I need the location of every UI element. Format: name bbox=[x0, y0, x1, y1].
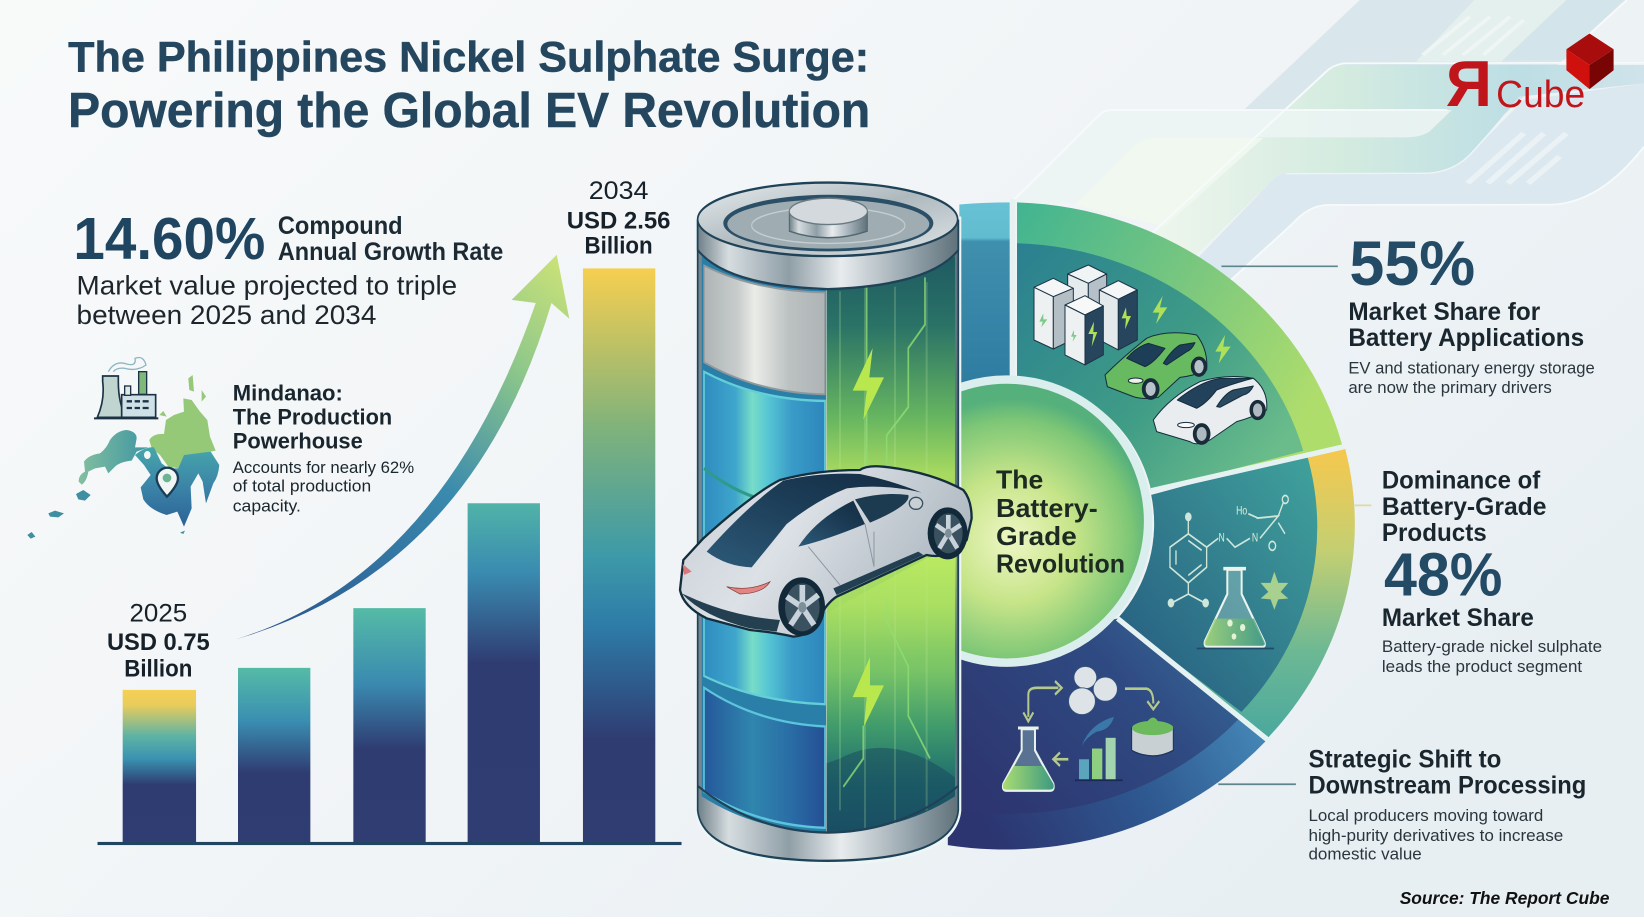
label: 2025 value: Billion bbox=[124, 655, 192, 682]
flask bbox=[1197, 569, 1274, 649]
text: downstream processing: Strategic Shift to bbox=[1308, 745, 1501, 773]
stat: CAGR: between 2025 and 2034 bbox=[77, 299, 376, 330]
pellets bbox=[1069, 666, 1117, 715]
stat: 48% battery-grade: Battery-Grade bbox=[1382, 493, 1546, 521]
source note: Source: The Report Cube bbox=[1400, 888, 1609, 908]
text: Mindanao: The Production bbox=[233, 405, 392, 430]
molecule: N bbox=[1252, 532, 1258, 545]
process arrows bbox=[1023, 681, 1159, 766]
label: 2034 value: 2034 bbox=[589, 177, 648, 205]
stat: 55% market share: 55% bbox=[1349, 229, 1475, 299]
stat: 48% battery-grade: Battery-grade nickel sulphate bbox=[1382, 637, 1602, 656]
hub title: Battery- bbox=[996, 493, 1098, 523]
icon: molecule and flask bbox=[1168, 495, 1288, 649]
mini bars bbox=[1075, 717, 1123, 780]
text: Mindanao bbox=[233, 381, 414, 516]
battery rim and terminal bbox=[698, 183, 958, 833]
green EV bbox=[1105, 333, 1207, 399]
label: 2034 value: Billion bbox=[585, 233, 653, 260]
stat: CAGR: Annual Growth Rate bbox=[278, 238, 503, 266]
bar chart bbox=[98, 268, 682, 845]
stat: 48% battery-grade: Products bbox=[1382, 519, 1487, 547]
stat: 48% battery-grade: 48% bbox=[1384, 541, 1502, 609]
stat: 48% battery-grade bbox=[1382, 467, 1602, 676]
title: The Philippines Nickel Sulphate Surge: bbox=[68, 33, 869, 81]
jar bbox=[1132, 718, 1173, 756]
stat: 55% market share: Battery Applications bbox=[1348, 324, 1584, 352]
battery casing bbox=[698, 221, 958, 861]
circular segments bbox=[865, 199, 1355, 850]
hub title: Grade bbox=[996, 521, 1077, 551]
label: 2034 value: USD 2.56 bbox=[567, 208, 670, 235]
stat: CAGR: Market value projected to triple bbox=[77, 270, 457, 301]
logo: Cube bbox=[1496, 73, 1585, 115]
icon: downstream process bbox=[1003, 666, 1173, 790]
text: downstream processing: high-purity derivatives to increase bbox=[1308, 826, 1563, 845]
icon: storage units and EVs bbox=[1034, 265, 1267, 444]
stat: 48% battery-grade: leads the product segment bbox=[1382, 657, 1582, 676]
text: Mindanao: Accounts for nearly 62% bbox=[233, 458, 414, 477]
storage units bbox=[1034, 265, 1137, 365]
hub title: Revolution bbox=[996, 548, 1125, 578]
sprout bbox=[1261, 572, 1288, 610]
text: Mindanao: Mindanao: bbox=[233, 381, 343, 406]
text: downstream processing: Local producers moving toward bbox=[1308, 806, 1543, 825]
text: Mindanao: Powerhouse bbox=[233, 429, 363, 454]
flask bbox=[1003, 728, 1054, 790]
label: 2025 value bbox=[107, 600, 210, 682]
text: downstream processing: Downstream Processing bbox=[1308, 772, 1586, 800]
lightning bolts bbox=[853, 348, 884, 726]
molecule: N bbox=[1219, 532, 1225, 545]
label: 2025 value: 2025 bbox=[129, 600, 187, 628]
white EV bbox=[1153, 376, 1267, 444]
stat: 55% market share: Market Share for bbox=[1348, 298, 1540, 326]
molecule bbox=[1168, 495, 1288, 607]
stat: CAGR: 14.60% bbox=[73, 205, 265, 272]
bolts bbox=[1039, 296, 1231, 363]
decorative ribbons top right bbox=[1012, 0, 1644, 283]
logo: Я bbox=[1446, 47, 1492, 120]
icon: Mindanao map bbox=[27, 375, 219, 539]
stat: 55% market share bbox=[1348, 229, 1595, 397]
label: 2025 value: USD 0.75 bbox=[107, 629, 210, 656]
icon: electric car over battery bbox=[680, 466, 972, 650]
hub title: The bbox=[996, 465, 1043, 495]
stat: CAGR: Compound bbox=[278, 212, 403, 240]
battery cells bbox=[702, 256, 826, 832]
green glass half bbox=[827, 256, 955, 832]
text: downstream processing bbox=[1308, 745, 1586, 864]
icon: battery bbox=[698, 183, 958, 861]
icon: factory and Mindanao map bbox=[27, 357, 219, 539]
stat: 55% market share: EV and stationary energy storage bbox=[1348, 358, 1595, 377]
leader lines bbox=[1218, 266, 1371, 784]
icon: factory bbox=[94, 357, 158, 418]
stat: 48% battery-grade: Dominance of bbox=[1382, 467, 1541, 495]
growth arrow bbox=[235, 255, 569, 640]
label: 2034 value bbox=[567, 177, 670, 260]
title bbox=[68, 33, 870, 138]
logo bbox=[1446, 34, 1614, 120]
molecule: Ho bbox=[1236, 506, 1247, 518]
stat: CAGR bbox=[73, 205, 503, 330]
text: Mindanao: capacity. bbox=[233, 497, 301, 516]
hub title bbox=[996, 465, 1125, 578]
stat: 55% market share: are now the primary drivers bbox=[1348, 378, 1552, 397]
text: downstream processing: domestic value bbox=[1308, 845, 1422, 864]
stat: 48% battery-grade: Market Share bbox=[1382, 604, 1534, 632]
title: Powering the Global EV Revolution bbox=[68, 83, 870, 138]
text: Mindanao: of total production bbox=[233, 477, 371, 496]
